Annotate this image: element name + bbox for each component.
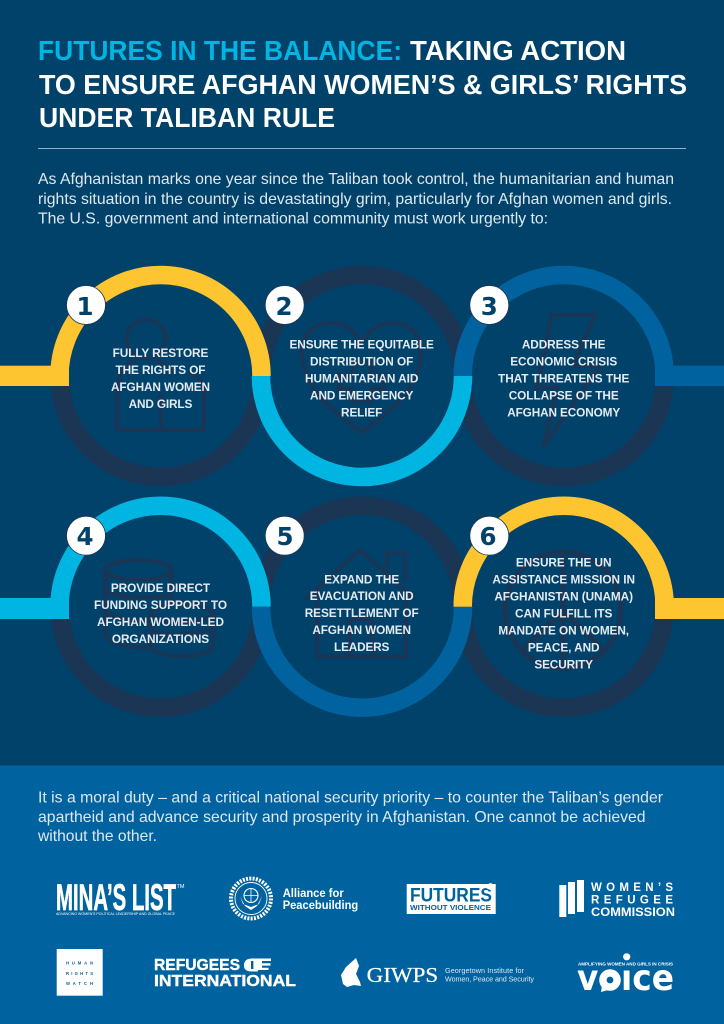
step 6 text: CAN FULFILL ITS: [515, 607, 612, 621]
icon: two people: [117, 320, 204, 430]
step 3 text: [498, 338, 629, 420]
logo: Women's Refugee Commission: COMMISSION: [591, 905, 675, 919]
step 5 badge: [265, 516, 304, 555]
logo: Human Rights Watch: WATCH: [66, 981, 93, 986]
step 3 text: ADDRESS THE: [522, 338, 606, 352]
step 5 text: [305, 572, 419, 654]
step 6 text: PEACE, AND: [528, 641, 600, 655]
step 5 text: RESETTLEMENT OF: [305, 606, 419, 620]
logo: GIWPS: Georgetown Institute for: [445, 966, 525, 975]
ring 6 highlight: yellow: [463, 506, 724, 619]
step 4 text: PROVIDE DIRECT: [111, 581, 211, 595]
step 5 text: EXPAND THE: [324, 572, 399, 586]
step 4 text: AFGHAN WOMEN-LED: [97, 615, 224, 629]
step 5 text: AFGHAN WOMEN: [312, 623, 411, 637]
step 2 text: AND EMERGENCY: [310, 388, 413, 402]
icon: coin stacks: [105, 560, 213, 656]
title: FUTURES IN THE BALANCE:: [38, 35, 402, 66]
logo: Voice: voice: [577, 958, 674, 999]
step 1 text: [111, 346, 210, 411]
ring 1 highlight: yellow: [0, 275, 262, 386]
step 1 badge: [66, 286, 106, 324]
step 6 badge: 6: [479, 522, 497, 551]
closing statement: It is a moral duty – and a critical national security priority – to counter the Taliban’s gender: [38, 790, 664, 807]
logo: Futures Without Violence: WITHOUT VIOLENCE: [410, 903, 491, 912]
logo: Alliance for Peacebuilding: [231, 878, 358, 918]
logo: Women's Refugee Commission: REFUGEE: [591, 894, 673, 906]
closing statement: apartheid and advance security and prosperity in Afghanistan. One cannot be achieved: [38, 809, 646, 826]
logo: Voice: AMPLIFYING WOMEN AND GIRLS IN CRISIS: [578, 962, 673, 967]
icon: peace sign: [505, 551, 621, 669]
logo: Mina's List: TM: [176, 884, 184, 890]
step 6 badge: [470, 516, 509, 555]
step 2 badge: 2: [275, 292, 293, 321]
step 4 text: FUNDING SUPPORT TO: [94, 598, 227, 612]
ring 4 highlight: cyan: [0, 506, 262, 619]
logo: Alliance for Peacebuilding: Peacebuilding: [283, 899, 358, 912]
step 6 text: AFGHANISTAN (UNAMA): [494, 590, 633, 604]
step 6 text: ASSISTANCE MISSION IN: [492, 573, 635, 587]
step 3 badge: [470, 286, 509, 324]
step 5 text: LEADERS: [334, 640, 389, 654]
icon: heart with cross: [302, 323, 421, 432]
title: TO ENSURE AFGHAN WOMEN’S & GIRLS’ RIGHTS: [39, 69, 687, 100]
step 4 badge: 4: [76, 522, 94, 551]
step 2 text: HUMANITARIAN AID: [305, 371, 419, 385]
logo: Mina's List: ADVANCING WOMEN’S POLITICAL LEADERSHIP AND GLOBAL PEACE: [56, 911, 175, 916]
logo: GIWPS: [341, 958, 534, 987]
icon: lightning bolt: [537, 315, 600, 447]
title: [38, 35, 687, 133]
step 4 text: ORGANIZATIONS: [112, 632, 209, 646]
step 6 text: SECURITY: [534, 658, 593, 672]
step 5 text: EVACUATION AND: [310, 589, 414, 603]
step 3 badge: 3: [481, 292, 498, 321]
ring 2 highlight: cyan: [261, 376, 463, 477]
logo: GIWPS: Women, Peace and Security: [445, 975, 534, 984]
logo: Human Rights Watch: [57, 949, 103, 996]
step 2 text: RELIEF: [341, 406, 382, 420]
bottom panel: [0, 766, 724, 1024]
step 6 text: ENSURE THE UN: [516, 555, 612, 569]
step 1 text: AND GIRLS: [129, 397, 192, 411]
logo: GIWPS: GIWPS: [367, 963, 438, 987]
step 6 text: [492, 555, 635, 672]
logo: Refugees International: [154, 957, 296, 990]
step 1 text: FULLY RESTORE: [113, 346, 208, 360]
step 5 badge: 5: [276, 522, 294, 551]
step 3 text: THAT THREATENS THE: [498, 372, 629, 386]
step 6 text: MANDATE ON WOMEN,: [498, 624, 629, 638]
step 1 text: AFGHAN WOMEN: [111, 380, 210, 394]
icon: house: [305, 550, 416, 656]
step 2 text: ENSURE THE EQUITABLE: [290, 337, 434, 351]
step 1 badge: 1: [76, 292, 94, 321]
logo: Mina's List: MINA’S LIST: [56, 876, 176, 918]
step 2 text: [290, 337, 434, 420]
ring 3 highlight: blue: [463, 275, 724, 386]
logo: Human Rights Watch: HUMAN: [66, 960, 93, 966]
logo: Refugees International: REFUGEES: [154, 957, 240, 974]
closing statement: without the other.: [37, 828, 157, 845]
step 3 text: ECONOMIC CRISIS: [510, 355, 617, 369]
logo: Mina's List: [56, 876, 184, 918]
logo: Futures Without Violence: [407, 883, 496, 914]
closing statement: [37, 790, 664, 845]
title: TAKING ACTION: [410, 35, 626, 66]
ring 5 highlight: blue: [261, 607, 463, 708]
step 2 badge: [265, 286, 304, 324]
logo: Alliance for Peacebuilding: Alliance for: [283, 887, 344, 900]
intro text: The U.S. government and international community must work urgently to:: [38, 210, 548, 228]
logo: Women's Refugee Commission: [559, 880, 675, 919]
dark base rings: [60, 275, 665, 708]
logo: Human Rights Watch: RIGHTS: [66, 971, 93, 976]
step 4 badge: [66, 516, 106, 555]
intro text: [38, 171, 674, 228]
step 4 text: [94, 581, 227, 646]
step 2 text: DISTRIBUTION OF: [310, 354, 413, 368]
logo: Refugees International: INTERNATIONAL: [154, 973, 296, 990]
title: UNDER TALIBAN RULE: [39, 102, 335, 133]
intro text: rights situation in the country is devastatingly grim, particularly for Afghan women and girls.: [38, 191, 672, 208]
step 3 text: AFGHAN ECONOMY: [507, 406, 620, 420]
step 1 text: THE RIGHTS OF: [116, 363, 206, 377]
step 3 text: COLLAPSE OF THE: [509, 388, 619, 402]
intro text: As Afghanistan marks one year since the Taliban took control, the humanitarian and human: [38, 171, 674, 188]
logo: Women's Refugee Commission: WOMEN’S: [591, 882, 673, 894]
logo: Futures Without Violence: FUTURES: [410, 886, 492, 906]
